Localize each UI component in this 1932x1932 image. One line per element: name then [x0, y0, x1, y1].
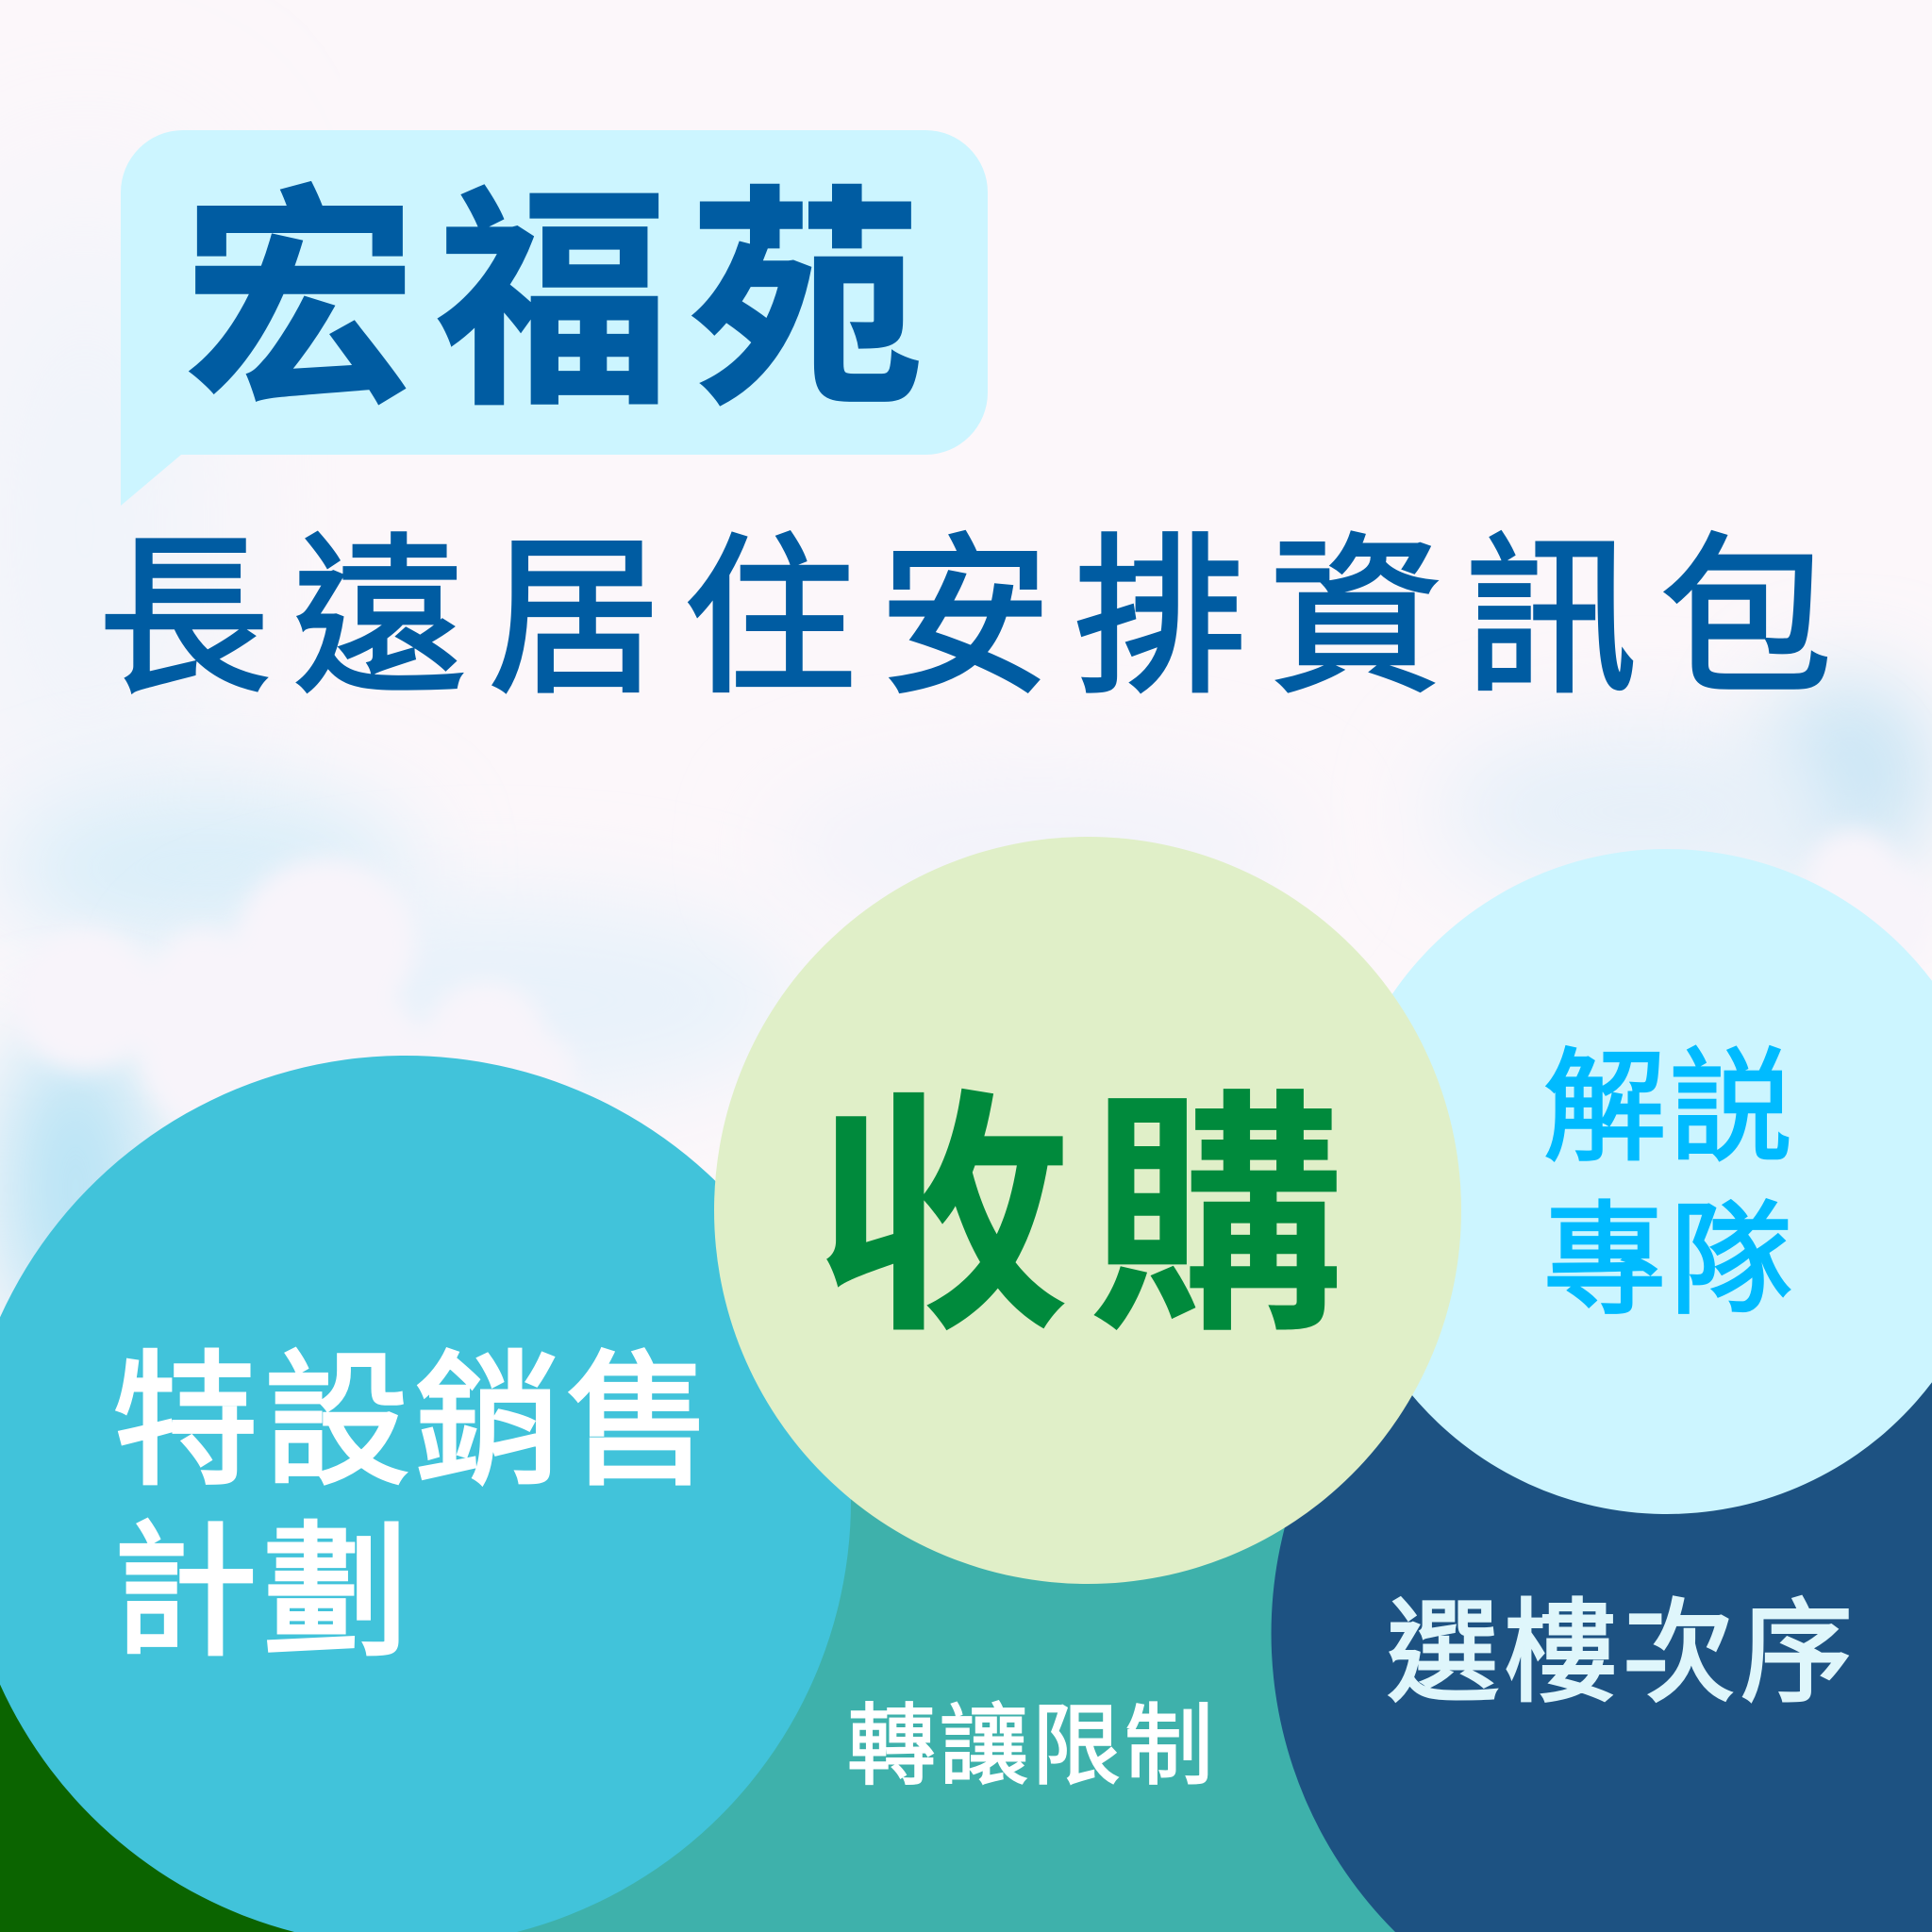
panel: light blue circle [1334, 849, 1932, 1514]
panel: cyan circle [0, 1056, 851, 1932]
label: explanation team [1543, 1039, 1796, 1329]
panel: navy circle [1272, 1211, 1932, 1932]
label: explanation team: 專隊 [1543, 1191, 1796, 1329]
label: flat selection order: 選樓次序 [1387, 1591, 1858, 1716]
panel: pale green circle [714, 837, 1461, 1584]
panel: teal area [472, 1415, 1415, 1932]
dark green corner [0, 1604, 377, 1932]
speech bubble [121, 130, 988, 506]
title: estate name: 宏福苑 [183, 171, 941, 433]
label: explanation team: 解説 [1543, 1039, 1796, 1176]
label: transfer restriction: 轉讓限制 [847, 1696, 1217, 1795]
label: special sales scheme [112, 1341, 717, 1674]
subtitle: 長遠居住安排資訊包 [98, 522, 1856, 714]
label: acquisition: 收購 [814, 1074, 1363, 1361]
label: special sales scheme: 特設銷售 [113, 1341, 717, 1503]
label: special sales scheme: 計劃 [112, 1511, 414, 1674]
